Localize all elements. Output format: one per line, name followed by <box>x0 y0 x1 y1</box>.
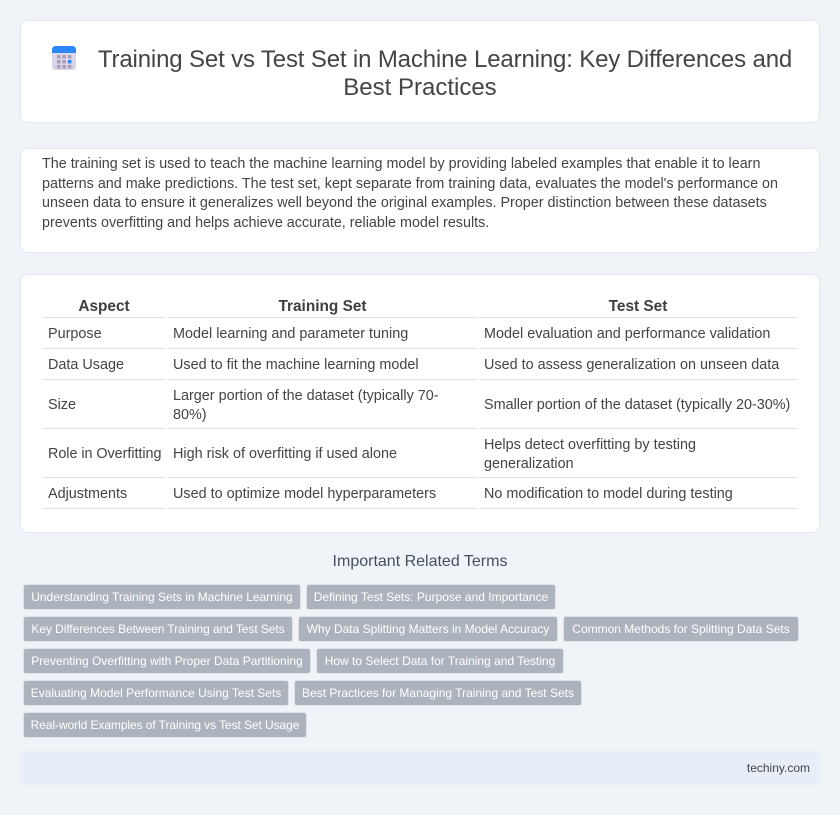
text block: introduction: unseen data to ensure it generalizes well beyond the original examples. Proper distinction between these datasets <box>42 195 767 211</box>
related term tags: Key Differences Between Training and Test Sets <box>31 622 285 636</box>
panel: introduction <box>20 148 820 253</box>
table header: Test Set <box>609 298 667 315</box>
table rows: High risk of overfitting if used alone <box>173 446 397 462</box>
text block: introduction: patterns and make predictions. The test set, kept separate from training data, evaluates the model's performance on <box>42 176 778 192</box>
related term tags: How to Select Data for Training and Testing <box>325 654 555 668</box>
text block: introduction: The training set is used to teach the machine learning model by providing labeled examples that enable it to learn <box>42 156 760 172</box>
table rows: Data Usage <box>48 357 124 373</box>
icon: calendar <box>52 46 76 70</box>
footer <box>20 751 820 785</box>
comparison table <box>43 298 797 509</box>
table rows: Role in Overfitting <box>48 446 161 462</box>
table rows: Larger portion of the dataset (typically 70- <box>173 388 439 404</box>
title: Training Set vs Test Set in Machine Learning: Key Differences and <box>98 46 792 73</box>
related term tags: Understanding Training Sets in Machine Learning <box>31 590 293 604</box>
table rows: Model evaluation and performance validation <box>484 326 770 342</box>
table rows: 80%) <box>173 407 207 423</box>
table rows: generalization <box>484 456 574 472</box>
text block: introduction: prevents overfitting and helps achieve accurate, reliable model results. <box>42 215 489 231</box>
title: Best Practices <box>343 74 497 101</box>
table rows: Used to assess generalization on unseen data <box>484 357 779 373</box>
related term tags: Common Methods for Splitting Data Sets <box>572 622 790 636</box>
related term tags <box>23 584 799 738</box>
panel: header <box>20 20 820 123</box>
heading: important related terms: Important Related Terms <box>333 553 507 570</box>
table rows: Smaller portion of the dataset (typically 20-30%) <box>484 397 790 413</box>
title <box>98 46 792 101</box>
text block: introduction <box>42 156 778 231</box>
table rows: No modification to model during testing <box>484 486 733 502</box>
panel: comparison table <box>20 274 820 533</box>
related term tags: Preventing Overfitting with Proper Data Partitioning <box>31 654 303 668</box>
table rows: Model learning and parameter tuning <box>173 326 408 342</box>
table header <box>78 298 668 315</box>
table rows: Helps detect overfitting by testing <box>484 437 696 453</box>
related term tags: Real-world Examples of Training vs Test Set Usage <box>31 718 299 732</box>
related term tags: Defining Test Sets: Purpose and Importance <box>314 590 548 604</box>
table rows: Used to fit the machine learning model <box>173 357 419 373</box>
related term tags: Why Data Splitting Matters in Model Accuracy <box>307 622 549 636</box>
related term tags: Evaluating Model Performance Using Test Sets <box>31 686 281 700</box>
table rows: Used to optimize model hyperparameters <box>173 486 436 502</box>
table rows: Adjustments <box>48 486 127 502</box>
table rows <box>43 317 797 509</box>
table header: Training Set <box>278 298 367 315</box>
table rows: Size <box>48 397 76 413</box>
footer source: techiny.com <box>747 761 810 775</box>
table header: Aspect <box>78 298 130 315</box>
related term tags: Best Practices for Managing Training and Test Sets <box>302 686 574 700</box>
table rows: Purpose <box>48 326 102 342</box>
